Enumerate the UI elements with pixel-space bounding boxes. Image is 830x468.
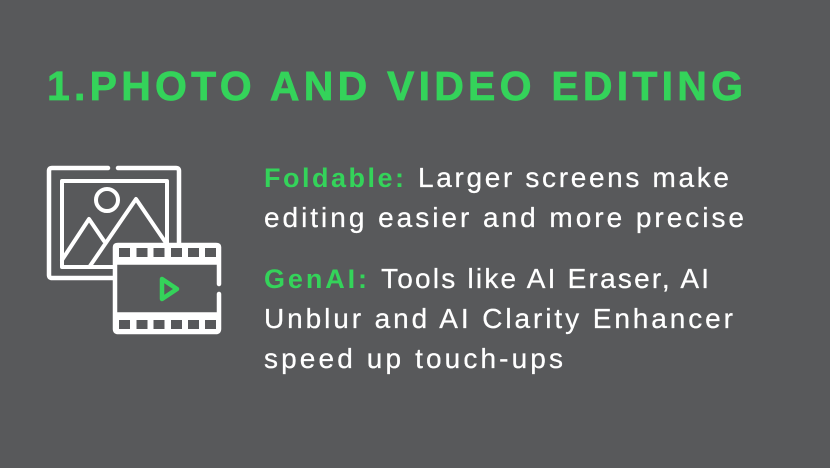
title: 1.PHOTO AND VIDEO EDITING — [47, 63, 743, 109]
icon: photo and video frames — [49, 168, 219, 333]
icon: photo frame — [49, 168, 179, 278]
icon: play button — [162, 279, 177, 299]
text block: foldable — [264, 162, 744, 233]
genai description line 2: Unblur and AI Clarity Enhancer — [264, 303, 733, 334]
foldable description line 1: Larger screens make — [418, 162, 729, 193]
genai description line 1: Tools like AI Eraser, AI — [381, 263, 709, 294]
text block: genai — [264, 263, 733, 374]
genai description line 3: speed up touch-ups — [264, 343, 563, 374]
foldable label: Foldable: — [264, 163, 404, 193]
genai label: GenAI: — [264, 264, 367, 294]
icon: film strip — [115, 245, 219, 333]
foldable description line 2: editing easier and more precise — [264, 202, 744, 233]
